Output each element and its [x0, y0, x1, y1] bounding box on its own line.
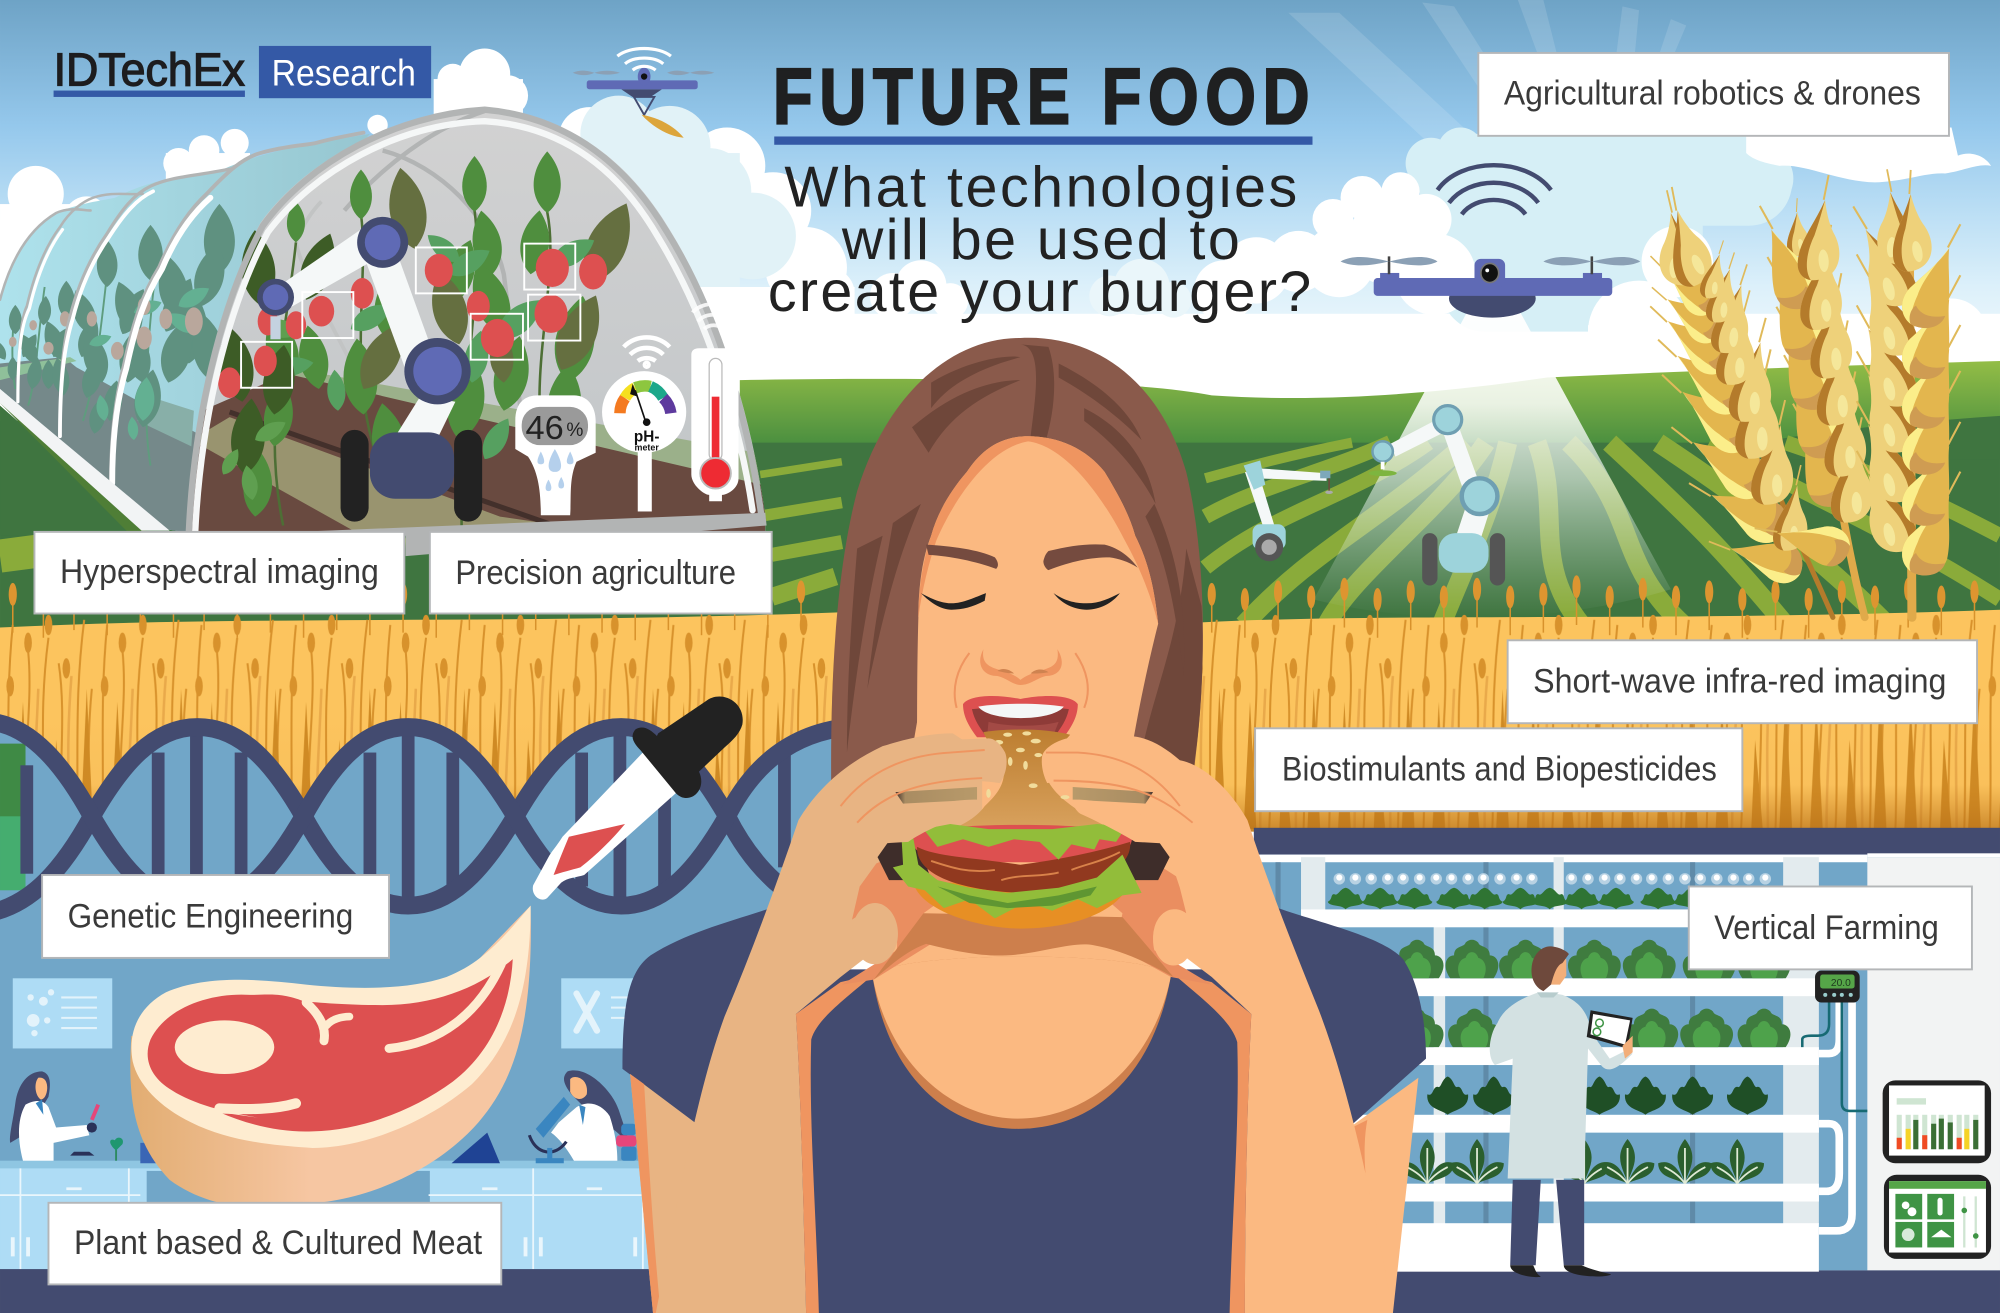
- pH meter sensor: [602, 371, 686, 511]
- imaging boxes on tomatoes: [241, 244, 580, 388]
- shelves: [1301, 909, 1819, 1272]
- label: Vertical Farming: Vertical Farming: [1714, 909, 1939, 947]
- tunnel side glazing: [0, 134, 370, 533]
- greenhouse frame: [0, 110, 761, 533]
- subtitle: What technologies: [784, 156, 1297, 220]
- label: Vertical Farming: [1689, 886, 1972, 969]
- wall poster: chromosome: [561, 978, 638, 1048]
- label: Hyperspectral imaging: [34, 532, 404, 614]
- logo: IDTechEx Research: Research: [272, 52, 416, 93]
- wheat field: [0, 575, 2000, 832]
- soil moisture sensor: 46: [526, 410, 564, 447]
- panel: cultured meat laboratory: [0, 722, 848, 1313]
- label: Agricultural robotics & drones: Agricultural robotics & drones: [1504, 75, 1921, 113]
- label: Precision agriculture: Precision agriculture: [455, 554, 736, 592]
- panel: vertical farm: [1254, 828, 2000, 1313]
- grow lights: [1334, 873, 1771, 885]
- ear 1: [1703, 521, 1808, 588]
- tomato plants: [213, 151, 644, 536]
- label: Biostimulants and Biopesticides: [1255, 728, 1742, 811]
- label: Plant based & Cultured Meat: [48, 1203, 501, 1284]
- robot arm with hyperspectral camera: [257, 217, 482, 522]
- subtitle: create your burger?: [768, 260, 1311, 324]
- fingers: [841, 738, 1193, 844]
- mouth: [963, 696, 1078, 737]
- right forearm and hand: [1046, 735, 1393, 1313]
- pH meter sensor: pH-: [634, 428, 659, 445]
- DNA helix: [0, 722, 848, 913]
- distant plants in tunnel: [0, 204, 235, 466]
- eyebrows: [926, 544, 1138, 570]
- logo: IDTechEx Research: [54, 43, 431, 98]
- soil moisture sensor: %: [566, 420, 583, 441]
- label: Short-wave infra-red imaging: [1508, 640, 1977, 723]
- wifi icon: small drone: [617, 48, 671, 70]
- small drone carrying wheat: [573, 68, 714, 138]
- green hills and striped crop fields: [0, 361, 2000, 638]
- shelving uprights: [1276, 857, 1819, 1227]
- ear 3: [1836, 442, 1923, 561]
- soil rows: [179, 111, 778, 542]
- title: FUTURE FOOD: [773, 54, 1310, 141]
- nose: [980, 649, 1062, 685]
- sun rays: [1288, 0, 1686, 179]
- left upper arm below sleeve: [630, 1074, 707, 1313]
- lab floor: [0, 1269, 689, 1313]
- woman eating burger: [622, 338, 1426, 1313]
- face: [917, 436, 1158, 816]
- label: Biostimulants and Biopesticides: Biostimulants and Biopesticides: [1282, 751, 1717, 789]
- dashboard screen: charts: [1883, 1080, 1991, 1163]
- small field robot right: [1369, 406, 1505, 585]
- left forearm and hand: [656, 733, 982, 1313]
- label: Short-wave infra-red imaging: Short-wave infra-red imaging: [1533, 663, 1946, 701]
- greenhouse base: [0, 389, 767, 556]
- label: Hyperspectral imaging: Hyperspectral imaging: [60, 553, 379, 591]
- clouds: left: [0, 48, 528, 319]
- hair: [831, 338, 1203, 829]
- subtitle: [768, 156, 1311, 324]
- label: Agricultural robotics & drones: [1478, 53, 1949, 136]
- farm worker with tablet: [1490, 946, 1633, 1277]
- cut of meat: [130, 906, 531, 1207]
- scientist left: [10, 1071, 123, 1161]
- pipes: [1802, 1003, 1867, 1231]
- clouds: right: [1194, 128, 2000, 389]
- control meter: 20.0: [1831, 978, 1851, 989]
- pH meter sensor: meter: [635, 442, 659, 452]
- dashboard screen: controls: [1884, 1175, 1991, 1259]
- label: Precision agriculture: [430, 532, 772, 614]
- label: Genetic Engineering: Genetic Engineering: [68, 897, 353, 935]
- clouds: centre behind subtitle: [714, 259, 2000, 390]
- wifi icon: thermometer: [693, 304, 737, 329]
- soil moisture sensor: [515, 395, 596, 515]
- wifi icon: pH meter: [624, 337, 670, 367]
- thermometer sensor: [691, 348, 739, 501]
- clouds: behind greenhouse right: [559, 96, 855, 389]
- right upper arm below sleeve: [1344, 1078, 1418, 1313]
- wifi icon: large drone: [1437, 165, 1551, 214]
- scientist right with microscope: [140, 1070, 636, 1163]
- burger: [878, 730, 1170, 929]
- dropper: [533, 696, 743, 900]
- label: Genetic Engineering: [42, 875, 389, 958]
- greenhouse interior: [186, 107, 765, 536]
- t-shirt: [622, 906, 1426, 1313]
- neck and chest: [872, 714, 1171, 1129]
- lab bench: [0, 1161, 651, 1269]
- control meter: [1815, 971, 1860, 1003]
- sky background: [0, 0, 2000, 383]
- greenhouse tunnel: [0, 107, 778, 556]
- tunnel floor and far ground: [0, 357, 198, 533]
- label: Plant based & Cultured Meat: Plant based & Cultured Meat: [74, 1224, 483, 1262]
- small field robot left: [1244, 460, 1333, 561]
- drone large: [1341, 256, 1640, 318]
- crops on shelves: [1328, 888, 1790, 1184]
- wall poster: molecule: [13, 978, 112, 1048]
- light beam from drone: [1314, 312, 1671, 618]
- neck skin over shirt: [872, 957, 1171, 1129]
- logo: IDTechEx Research: IDTechEx: [54, 43, 245, 95]
- large wheat ears: [1639, 167, 1983, 617]
- subtitle: will be used to: [841, 208, 1240, 272]
- closed eyes: [921, 593, 1120, 610]
- ear 2: [1750, 511, 1853, 570]
- burger shadow on chest: [874, 913, 1173, 980]
